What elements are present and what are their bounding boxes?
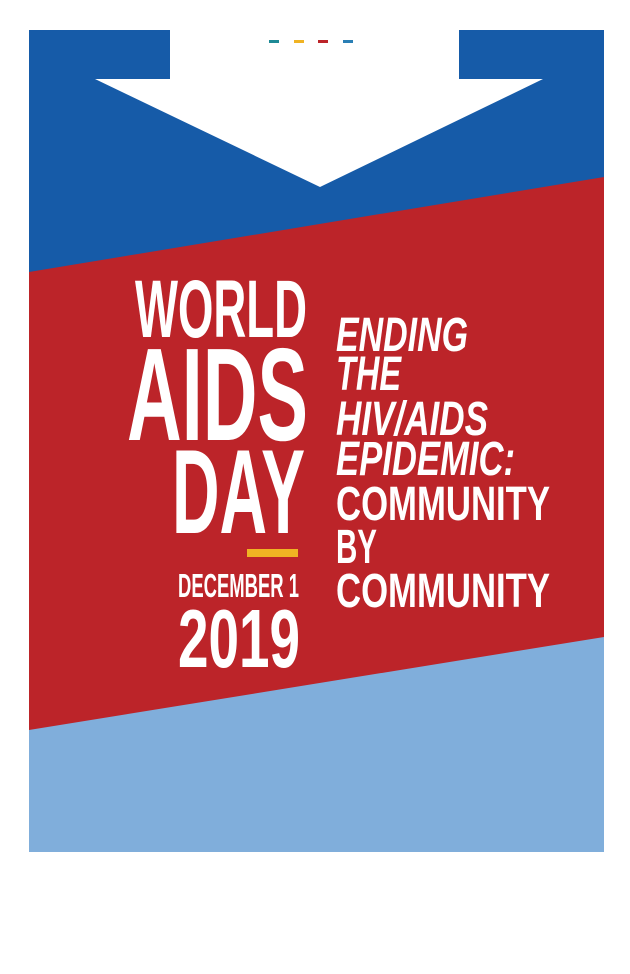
text block: theme: ENDING <box>336 309 468 362</box>
icon: colored dashes <box>269 40 353 43</box>
text block: theme: COMMUNITY <box>336 478 550 531</box>
text block: theme <box>336 309 550 618</box>
text block: theme: BY <box>336 521 377 574</box>
text block: date: DECEMBER 1 <box>178 567 299 604</box>
text block: theme: EPIDEMIC: <box>336 433 515 486</box>
title: World AIDS Day: DAY <box>172 425 305 559</box>
title: World AIDS Day <box>127 264 308 559</box>
panel: red diagonal band <box>29 177 604 730</box>
text block: theme: THE <box>336 348 402 401</box>
divider: yellow bar <box>247 549 298 557</box>
text block: theme: HIV/AIDS <box>336 393 488 446</box>
arrow: white down arrow <box>95 30 543 187</box>
text block: theme: COMMUNITY <box>336 565 550 618</box>
text block: date: 2019 <box>178 592 300 685</box>
panel: light blue bottom <box>29 600 604 852</box>
title: World AIDS Day: WORLD <box>135 264 307 355</box>
text block: date <box>178 567 300 685</box>
title: World AIDS Day: AIDS <box>127 321 308 468</box>
panel: blue top background <box>29 30 604 290</box>
